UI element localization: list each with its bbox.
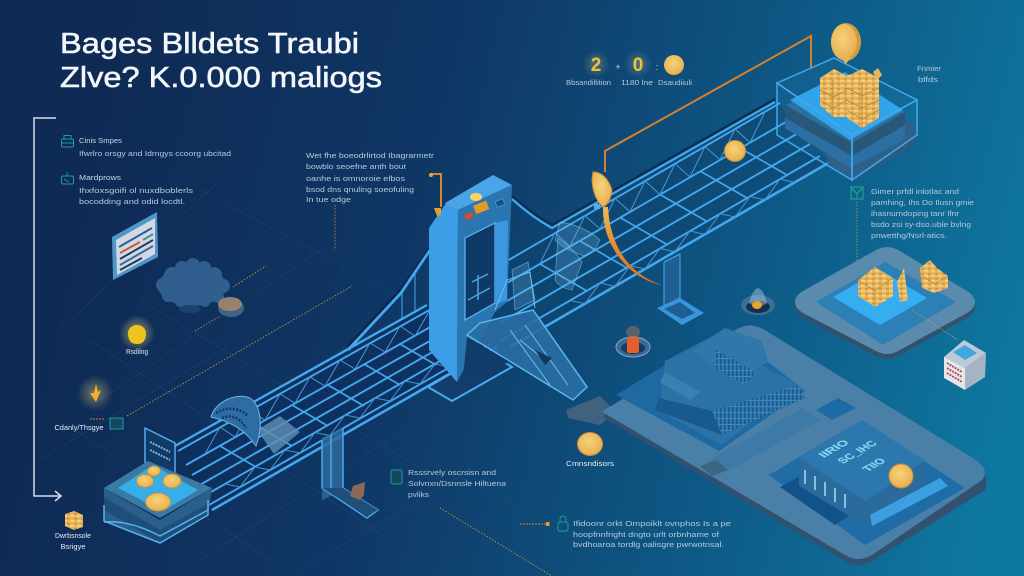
label: gold dot: Rsdilng xyxy=(126,347,148,356)
text block: centre note: oanhe is omnoroie elbos xyxy=(306,174,405,183)
road xyxy=(706,408,820,470)
tower top face xyxy=(445,175,512,210)
dotted connector: left side to tree xyxy=(127,205,552,576)
top legend: : xyxy=(656,62,658,72)
icon: glowing gold dot xyxy=(119,315,155,351)
orange arc xyxy=(603,207,662,285)
icon: teal lock xyxy=(558,516,568,531)
text block: right note: bsdo zsi sy-dso.uble bvlng xyxy=(871,220,971,229)
top legend: Dsaudiiuli xyxy=(658,78,692,87)
text block: left upper notes: Mardprows xyxy=(79,173,121,182)
tower front face xyxy=(457,185,512,382)
icon: orange cylinder xyxy=(616,326,650,357)
sign text: TIIO xyxy=(860,457,889,474)
icon: server cube xyxy=(944,340,986,390)
title: Zlve? K.0.000 maliogs xyxy=(60,62,382,94)
icon: teal marker xyxy=(851,187,863,199)
upper support pillar xyxy=(657,254,704,325)
icon: coin with label xyxy=(566,432,614,468)
text block: centre note xyxy=(306,151,435,204)
label: gold cube: Dwrbsnsole xyxy=(55,531,91,540)
text block: left upper notes: Ihxfoxsgoifi ol nuxdboblerls xyxy=(79,186,193,195)
icon: teal case xyxy=(62,136,74,147)
icon: legend coin xyxy=(664,55,684,75)
text block: left upper notes: bocodding and odid locdtl. xyxy=(79,197,185,206)
upper right coin vault xyxy=(777,23,917,180)
sign text: SC_IHC xyxy=(835,439,880,466)
lower cable xyxy=(348,244,432,350)
bracket arrow xyxy=(34,118,61,501)
text block: right note: pnwetthg/Nsrl-atics. xyxy=(871,231,947,240)
icon: legend glyph two: 0 xyxy=(633,55,643,76)
text block: bottom centre note: Solvnxn/Dsnnsle Hiltuena xyxy=(408,479,507,488)
text block: centre note: Wet fhe boeodrlirtod Ibagrarmetr xyxy=(306,151,435,160)
gold blocks xyxy=(858,260,948,307)
tower ramp xyxy=(467,310,587,400)
icon: tower lamp xyxy=(429,173,441,216)
text block: right note xyxy=(851,187,974,290)
title: Bages Blldets Traubi xyxy=(60,28,359,60)
label: vault: blfds xyxy=(918,75,938,84)
lower left coin tray xyxy=(104,428,212,543)
glass wireframe xyxy=(777,58,917,180)
label: vault xyxy=(917,64,942,84)
icon: flame spark xyxy=(77,375,113,411)
top legend xyxy=(566,50,692,87)
icon: gold cube xyxy=(65,511,83,530)
icon: coin on deck xyxy=(724,140,746,162)
top legend: + xyxy=(615,62,621,72)
bridge tower xyxy=(428,175,587,401)
icon: glass lamp xyxy=(741,288,775,315)
text block: bottom centre note xyxy=(391,468,507,499)
icon: big coin xyxy=(831,23,861,64)
icon: teal monitor xyxy=(62,172,74,184)
label: gold cube xyxy=(55,531,91,551)
icon: stone disc xyxy=(218,297,244,317)
text block: left upper notes xyxy=(62,136,231,206)
text block: centre note: bsod dns qnuling soeofuling xyxy=(306,185,414,194)
text block: bottom centre note: pvliks xyxy=(408,490,429,499)
gold stacks xyxy=(820,68,882,128)
icon: teal battery xyxy=(391,470,402,484)
title xyxy=(60,28,382,94)
icon: gold coin pin xyxy=(592,172,612,209)
text block: centre note: In tue odge xyxy=(306,195,351,204)
text block: bottom right note xyxy=(520,516,731,549)
text block: centre note: bowblo seoefne anth bout xyxy=(306,162,406,171)
tower left face xyxy=(429,203,458,382)
text block: right note: ihasnurndoping tanr lfnr xyxy=(871,209,960,218)
icon: legend glyph one: 2 xyxy=(591,55,601,76)
orange pointer xyxy=(520,522,550,526)
label and icon: change note xyxy=(54,418,123,432)
text block: right note: pamhing, Ihs Do Ilusn gmie xyxy=(871,198,974,207)
sign text: IIRIO xyxy=(816,438,853,460)
chart: lower bridge deck xyxy=(175,305,498,510)
right gold platform xyxy=(795,247,975,359)
icon: tree cluster xyxy=(156,258,230,313)
tower badges xyxy=(464,193,505,220)
text block: bottom right note: bvdhoaroa tordlg oalisgre pwrwotnsal. xyxy=(573,540,724,549)
coins in tray xyxy=(136,466,181,511)
icon: coin with label: Cmnsndisors xyxy=(566,459,614,468)
label and icon: change note: Cdanly/Thsgye xyxy=(54,423,104,432)
label: vault: Fnmier xyxy=(917,64,942,73)
text block: right note: Gimer prfdl inlotlac and xyxy=(871,187,959,196)
city platform xyxy=(566,326,986,565)
text block: bottom centre note: Rsssrvely oscrsisn and xyxy=(408,468,496,477)
text block: left upper notes: Ifwrlro orsgy and Idrngys ccoorg ubcitad xyxy=(79,149,231,158)
top legend: 1180 lne xyxy=(621,78,653,87)
text block: left upper notes: Cinis Smpes xyxy=(79,136,122,145)
icon: billboard xyxy=(112,212,158,280)
city block two xyxy=(769,420,965,545)
upper deck translucent machinery xyxy=(512,222,600,310)
label: gold cube: Bsrigye xyxy=(60,542,86,551)
text block: bottom right note: Ifidoonr orkt Ompoiklt ovnphos Is a pe xyxy=(573,519,731,528)
lower support pillar xyxy=(322,428,378,518)
top legend: Bbsandillition xyxy=(566,78,611,87)
orange connector line xyxy=(605,36,811,172)
chart: upper bridge deck xyxy=(500,99,830,347)
half dome on deck xyxy=(211,396,300,454)
text block: bottom right note: hoopfnnfright dngto urlt orbnhame of xyxy=(573,530,720,539)
city block one xyxy=(616,328,805,451)
sign text xyxy=(816,438,889,474)
